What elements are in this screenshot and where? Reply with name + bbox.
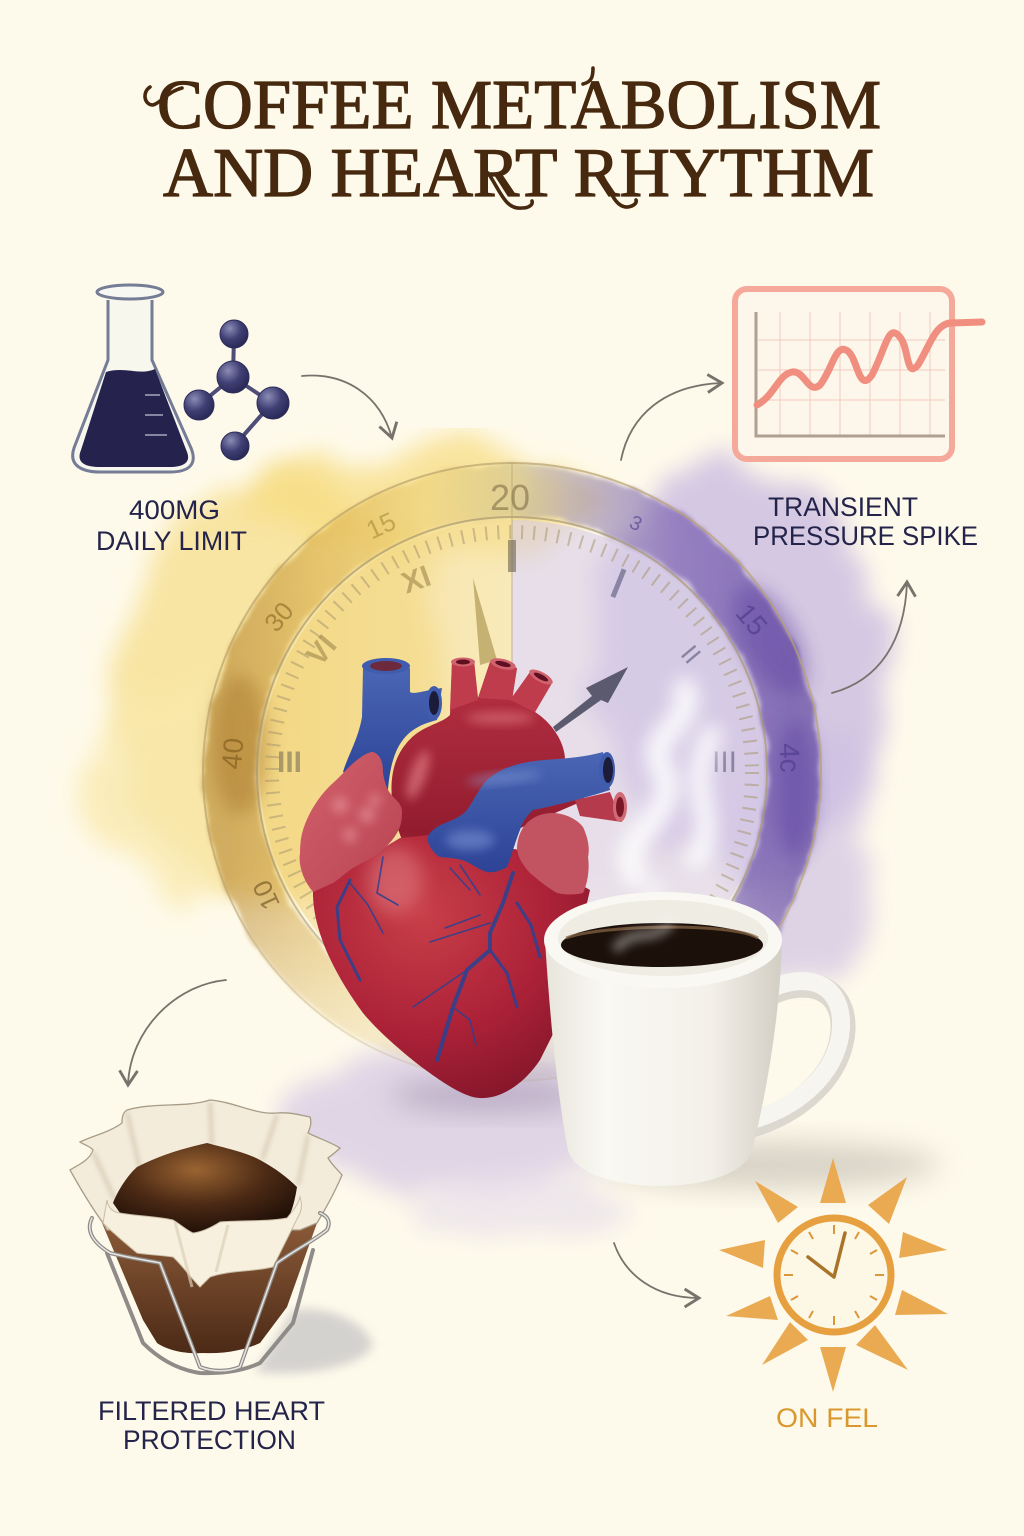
arrow: dial to chart <box>621 383 722 460</box>
clock numerals: XI <box>397 560 435 600</box>
clock dial <box>203 462 823 1081</box>
clock hands <box>473 578 497 665</box>
label: filtered heart protection: PROTECTION <box>123 1425 296 1455</box>
lower red vessel <box>575 792 622 822</box>
arrows <box>128 376 907 1298</box>
vena cava <box>343 668 442 790</box>
label: pressure spike <box>753 492 978 551</box>
arrow: dial to filter <box>128 980 226 1085</box>
icon: flask and molecule <box>73 285 289 472</box>
clock numerals: III <box>277 746 302 779</box>
icon: pressure chart <box>735 289 982 459</box>
label: daily limit: DAILY LIMIT <box>96 526 247 556</box>
arrow: mug to sun <box>614 1243 699 1298</box>
mug body <box>545 940 782 1186</box>
clock numerals: 20 <box>490 477 530 518</box>
wire stand <box>90 1213 329 1373</box>
flask <box>73 300 193 472</box>
clock numerals: III <box>712 746 737 779</box>
clock numerals: 3 <box>626 511 645 536</box>
paper front <box>103 1197 302 1287</box>
label: pressure spike: TRANSIENT <box>768 492 918 522</box>
coffee grounds <box>113 1143 297 1233</box>
clock numerals: 15 <box>361 506 400 545</box>
clock ring <box>203 463 823 1081</box>
clock numerals: II <box>675 639 707 669</box>
clock face <box>777 1218 891 1332</box>
title <box>145 67 881 212</box>
title swashes <box>145 68 636 208</box>
paper back <box>70 1100 342 1230</box>
mug shadow <box>600 1141 940 1189</box>
clock numerals: 30 <box>258 596 300 637</box>
clock face tint <box>260 526 512 936</box>
watercolor wash <box>85 450 880 1240</box>
label: on fel: ON FEL <box>776 1403 878 1433</box>
icon: sun clock <box>719 1158 948 1392</box>
sun rays <box>719 1158 948 1392</box>
filter shadow <box>255 1309 373 1373</box>
title: AND HEART RHYTHM <box>163 135 874 212</box>
clock numerals: 4c <box>774 742 806 773</box>
heart <box>300 656 627 1113</box>
coffee surface <box>561 923 763 967</box>
label: daily limit: 400MG <box>129 495 220 525</box>
pulmonary artery <box>427 752 610 872</box>
label: filtered heart protection <box>98 1396 325 1455</box>
mug handle <box>752 985 843 1125</box>
clock numerals: 40 <box>216 737 249 770</box>
molecule <box>184 320 289 460</box>
clock numerals: VI <box>300 629 344 672</box>
coffee mug <box>544 892 940 1189</box>
label: pressure spike: PRESSURE SPIKE <box>753 521 978 551</box>
heart shadow <box>390 1077 590 1113</box>
arrow: flask to dial <box>302 376 392 438</box>
heart body <box>313 835 590 1098</box>
label: filtered heart protection: FILTERED HEART <box>98 1396 325 1426</box>
right atrium <box>517 813 589 894</box>
clock numerals: 10 <box>246 876 286 915</box>
clock numerals <box>216 477 806 915</box>
aortic arch <box>391 661 585 850</box>
title: COFFEE METABOLISM <box>157 67 881 144</box>
steam <box>630 690 712 930</box>
glass brew <box>102 1223 317 1353</box>
icon: coffee filter <box>70 1100 373 1373</box>
left atrium <box>300 752 402 892</box>
clock numerals: 15 <box>730 598 773 641</box>
coronary vessels <box>337 857 540 1060</box>
arrow: dial to pressure label <box>832 582 907 693</box>
label: daily limit <box>96 495 247 556</box>
